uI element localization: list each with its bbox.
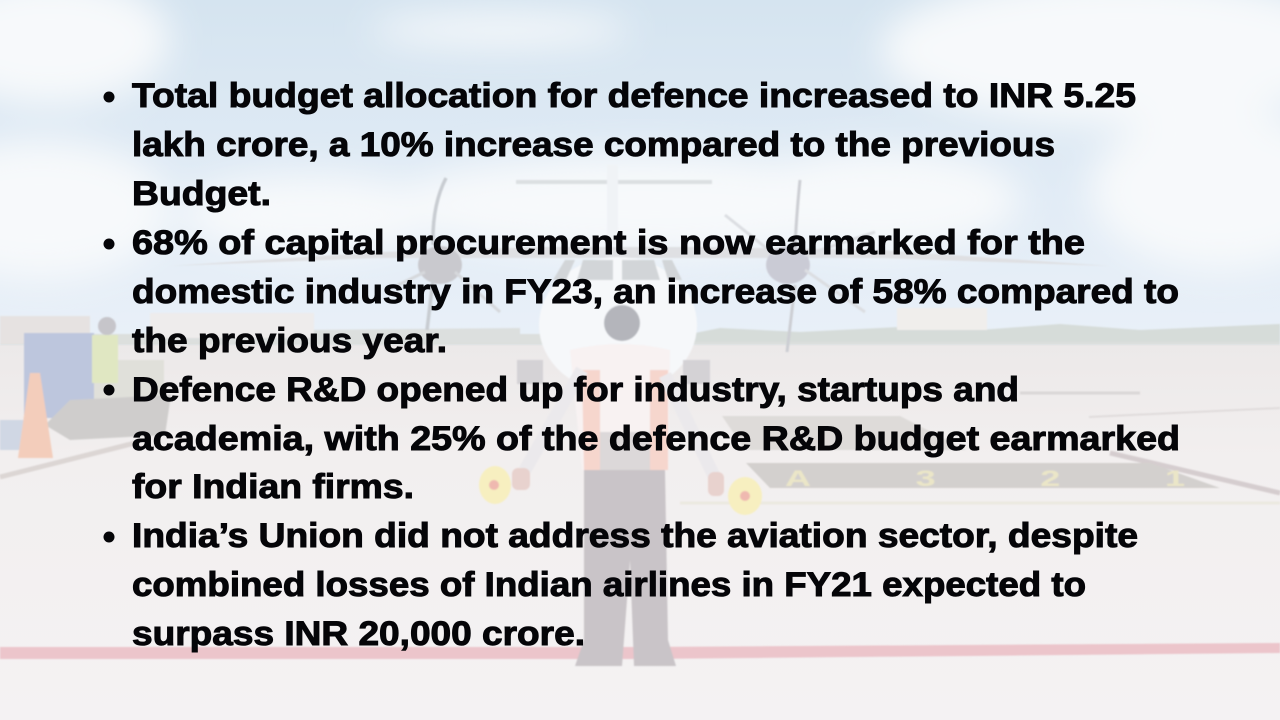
apron stand marking A321 — [722, 416, 1220, 491]
bullet: total defence budget: Budget. — [132, 175, 271, 213]
bullet: aviation sector: India’s Union did not address the aviation sector, despite — [132, 517, 1138, 555]
clouds — [0, 0, 1280, 280]
aircraft wing — [170, 247, 1110, 266]
bullet: total defence budget: lakh crore, a 10% increase compared to the previous — [132, 126, 1055, 164]
cockpit windows — [553, 260, 682, 280]
apron stand marking A321: A321 — [785, 467, 1185, 491]
aircraft tail — [516, 165, 712, 245]
sky — [0, 0, 1280, 345]
marshaller figure — [479, 305, 762, 666]
bullet: defence R&D: academia, with 25% of the defence R&D budget earmarked — [132, 420, 1180, 458]
right paddle — [728, 477, 762, 515]
right propeller and engine — [725, 180, 875, 352]
ground equipment at left — [0, 317, 171, 458]
bullet: defence R&D — [104, 371, 1180, 506]
bullet: aviation sector — [104, 517, 1138, 653]
ground worker — [92, 335, 118, 383]
bullet: capital procurement: 68% of capital procurement is now earmarked for the — [132, 224, 1085, 262]
bullet: capital procurement: the previous year. — [132, 322, 447, 360]
bullet: defence R&D: for Indian firms. — [132, 468, 414, 506]
traffic cones — [18, 373, 53, 458]
bullet: total defence budget: Total budget allocation for defence increased to INR 5.25 — [132, 77, 1136, 115]
bullet: defence R&D: Defence R&D opened up for industry, startups and — [132, 371, 1019, 409]
left paddle — [479, 466, 511, 504]
landing gear — [517, 360, 710, 384]
bullet: capital procurement — [104, 224, 1179, 360]
ground — [0, 345, 1280, 720]
apron lines — [0, 443, 135, 477]
fuselage — [539, 257, 697, 393]
bullet: aviation sector: combined losses of Indian airlines in FY21 expected to — [132, 566, 1086, 604]
bullet: total defence budget — [104, 77, 1136, 213]
bullet: aviation sector: surpass INR 20,000 crore. — [132, 615, 585, 653]
left propeller and engine — [398, 178, 500, 330]
treeline and buildings — [0, 308, 1280, 345]
red stripe — [0, 643, 1280, 659]
bullet: capital procurement: domestic industry in FY23, an increase of 58% compared to — [132, 273, 1179, 311]
